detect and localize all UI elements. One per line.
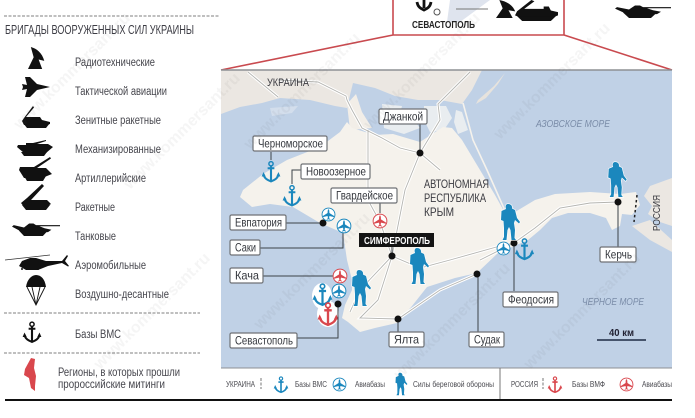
watermark: www.kommersant.ru	[520, 250, 644, 374]
inset: Sevastopol equipment	[412, 0, 558, 31]
legend bar under map: Силы береговой обороны	[413, 380, 494, 389]
bottom rule	[5, 399, 672, 401]
legend: naval bases: Базы ВМС	[75, 329, 121, 341]
legend bar under map: Базы ВМС	[295, 380, 327, 389]
legend bar under map: Базы ВМФ	[572, 380, 605, 389]
marker: Севастополь	[230, 283, 346, 348]
map panel	[221, 70, 672, 368]
marker: Саки	[230, 219, 351, 255]
inset: Sevastopol equipment: СЕВАСТОПОЛЬ	[412, 19, 475, 31]
sea and region labels: АВТОНОМНАЯ	[424, 177, 489, 191]
Perekop isthmus and Sivash flats	[347, 94, 372, 130]
sea and region labels	[267, 77, 663, 308]
land: Crimea	[240, 122, 640, 332]
sea and region labels: РОССИЯ	[651, 195, 663, 231]
legend: missile	[21, 184, 115, 214]
marker: Черноморское: Черноморское	[258, 136, 323, 150]
sea and region labels: РЕСПУБЛИКА	[424, 191, 486, 205]
marker: Феодосия: Феодосия	[508, 292, 554, 306]
legend: air defence: Зенитные ракетные	[75, 115, 161, 127]
icon: tank top right	[615, 6, 671, 18]
legend: aviation: Тактической авиации	[75, 86, 167, 98]
scale bar	[597, 327, 646, 340]
marker: Ялта	[389, 316, 424, 347]
legend: airmobile	[5, 255, 146, 272]
legend: missile: Ракетные	[75, 202, 115, 214]
sea and region labels: ЧЕРНОЕ МОРЕ	[582, 296, 645, 308]
Arabat spit	[463, 103, 510, 222]
map top edge	[221, 69, 672, 71]
legend bar under map	[221, 368, 672, 399]
sea and region labels: АЗОВСКОЕ МОРЕ	[535, 118, 611, 130]
marker: Севастополь: Севастополь	[235, 334, 293, 348]
watermark: www.kommersant.ru	[120, 70, 244, 194]
legend: mechanized	[17, 140, 161, 156]
legend: radio	[28, 47, 155, 69]
scale bar: 40 км	[609, 327, 634, 339]
marker: Черноморское	[253, 136, 327, 181]
watermark: www.kommersant.ru	[360, 10, 484, 134]
watermark: www.kommersant.ru	[490, 20, 614, 144]
legend: mechanized: Механизированные	[75, 144, 161, 156]
marker: Керчь	[600, 198, 636, 262]
marker: Гвардейское: Гвардейское	[336, 188, 393, 202]
marker: Новоозерное	[283, 164, 370, 205]
watermark: www.kommersant.ru	[390, 260, 514, 384]
legend: naval bases	[23, 322, 121, 342]
marker: Гвардейское	[331, 188, 397, 228]
watermark: www.kommersant.ru	[90, 250, 214, 374]
land: Ukraine mainland	[221, 70, 482, 114]
Karkinit shallow	[270, 106, 298, 116]
legend: pro-Russian rallies: Регионы, в которых прошли	[58, 367, 180, 379]
marker: Джанкой	[379, 109, 427, 156]
watermark: www.kommersant.ru	[10, 10, 134, 134]
marker: Кача: Кача	[235, 268, 259, 282]
marker: Евпатория	[230, 208, 335, 230]
marker: Керчь: Керчь	[605, 248, 632, 262]
legend heading: БРИГАДЫ ВООРУЖЕННЫХ СИЛ УКРАИНЫ	[5, 23, 194, 37]
legend bar under map: РОССИЯ	[511, 380, 538, 389]
border: Ukraine-Russia	[634, 195, 637, 222]
legend bar under map: Авиабазы	[355, 380, 385, 389]
legend: pro-Russian rallies: пророссийские митинги	[58, 379, 165, 391]
icon: anchor in inset	[417, 0, 431, 10]
land: Taman peninsula	[644, 178, 672, 226]
connector outline to inset	[221, 0, 672, 70]
legend: airmobile: Аэромобильные	[75, 260, 146, 272]
marker: Судак	[469, 270, 504, 347]
legend: tank: Танковые	[75, 231, 116, 243]
sea and region labels: УКРАИНА	[267, 77, 310, 89]
marker: Евпатория: Евпатория	[235, 216, 282, 230]
marker: Новоозерное: Новоозерное	[306, 164, 366, 178]
legend: airborne: Воздушно-десантные	[75, 289, 169, 301]
legend: artillery	[19, 157, 146, 185]
legend bar under map: УКРАИНА	[226, 380, 256, 389]
coastal defence soldiers	[352, 162, 627, 306]
marker: Кача	[230, 268, 347, 283]
legend bar under map: Авиабазы	[642, 380, 672, 389]
marker: Феодосия	[497, 239, 558, 307]
legend: pro-Russian rallies	[24, 358, 180, 391]
sea and region labels: КРЫМ	[424, 205, 454, 219]
marker: Ялта: Ялта	[394, 332, 419, 346]
legend: radio: Радиотехнические	[75, 57, 155, 69]
watermark: www.kommersant.ru	[240, 30, 364, 154]
marker: Симферополь: СИМФЕРОПОЛЬ	[364, 236, 430, 247]
marker: Саки: Саки	[235, 240, 256, 254]
marker: Джанкой: Джанкой	[383, 110, 423, 124]
marker: Симферополь	[359, 233, 434, 260]
legend: airborne	[26, 275, 169, 305]
legend: air defence	[22, 106, 161, 128]
marker: Судак: Судак	[474, 332, 501, 346]
roads	[248, 72, 618, 319]
legend: aviation	[22, 77, 167, 98]
legend: tank	[12, 224, 116, 243]
legend panel	[4, 16, 220, 391]
legend: artillery: Артиллерийские	[75, 173, 146, 185]
watermark: www.kommersant.ru	[250, 210, 374, 334]
